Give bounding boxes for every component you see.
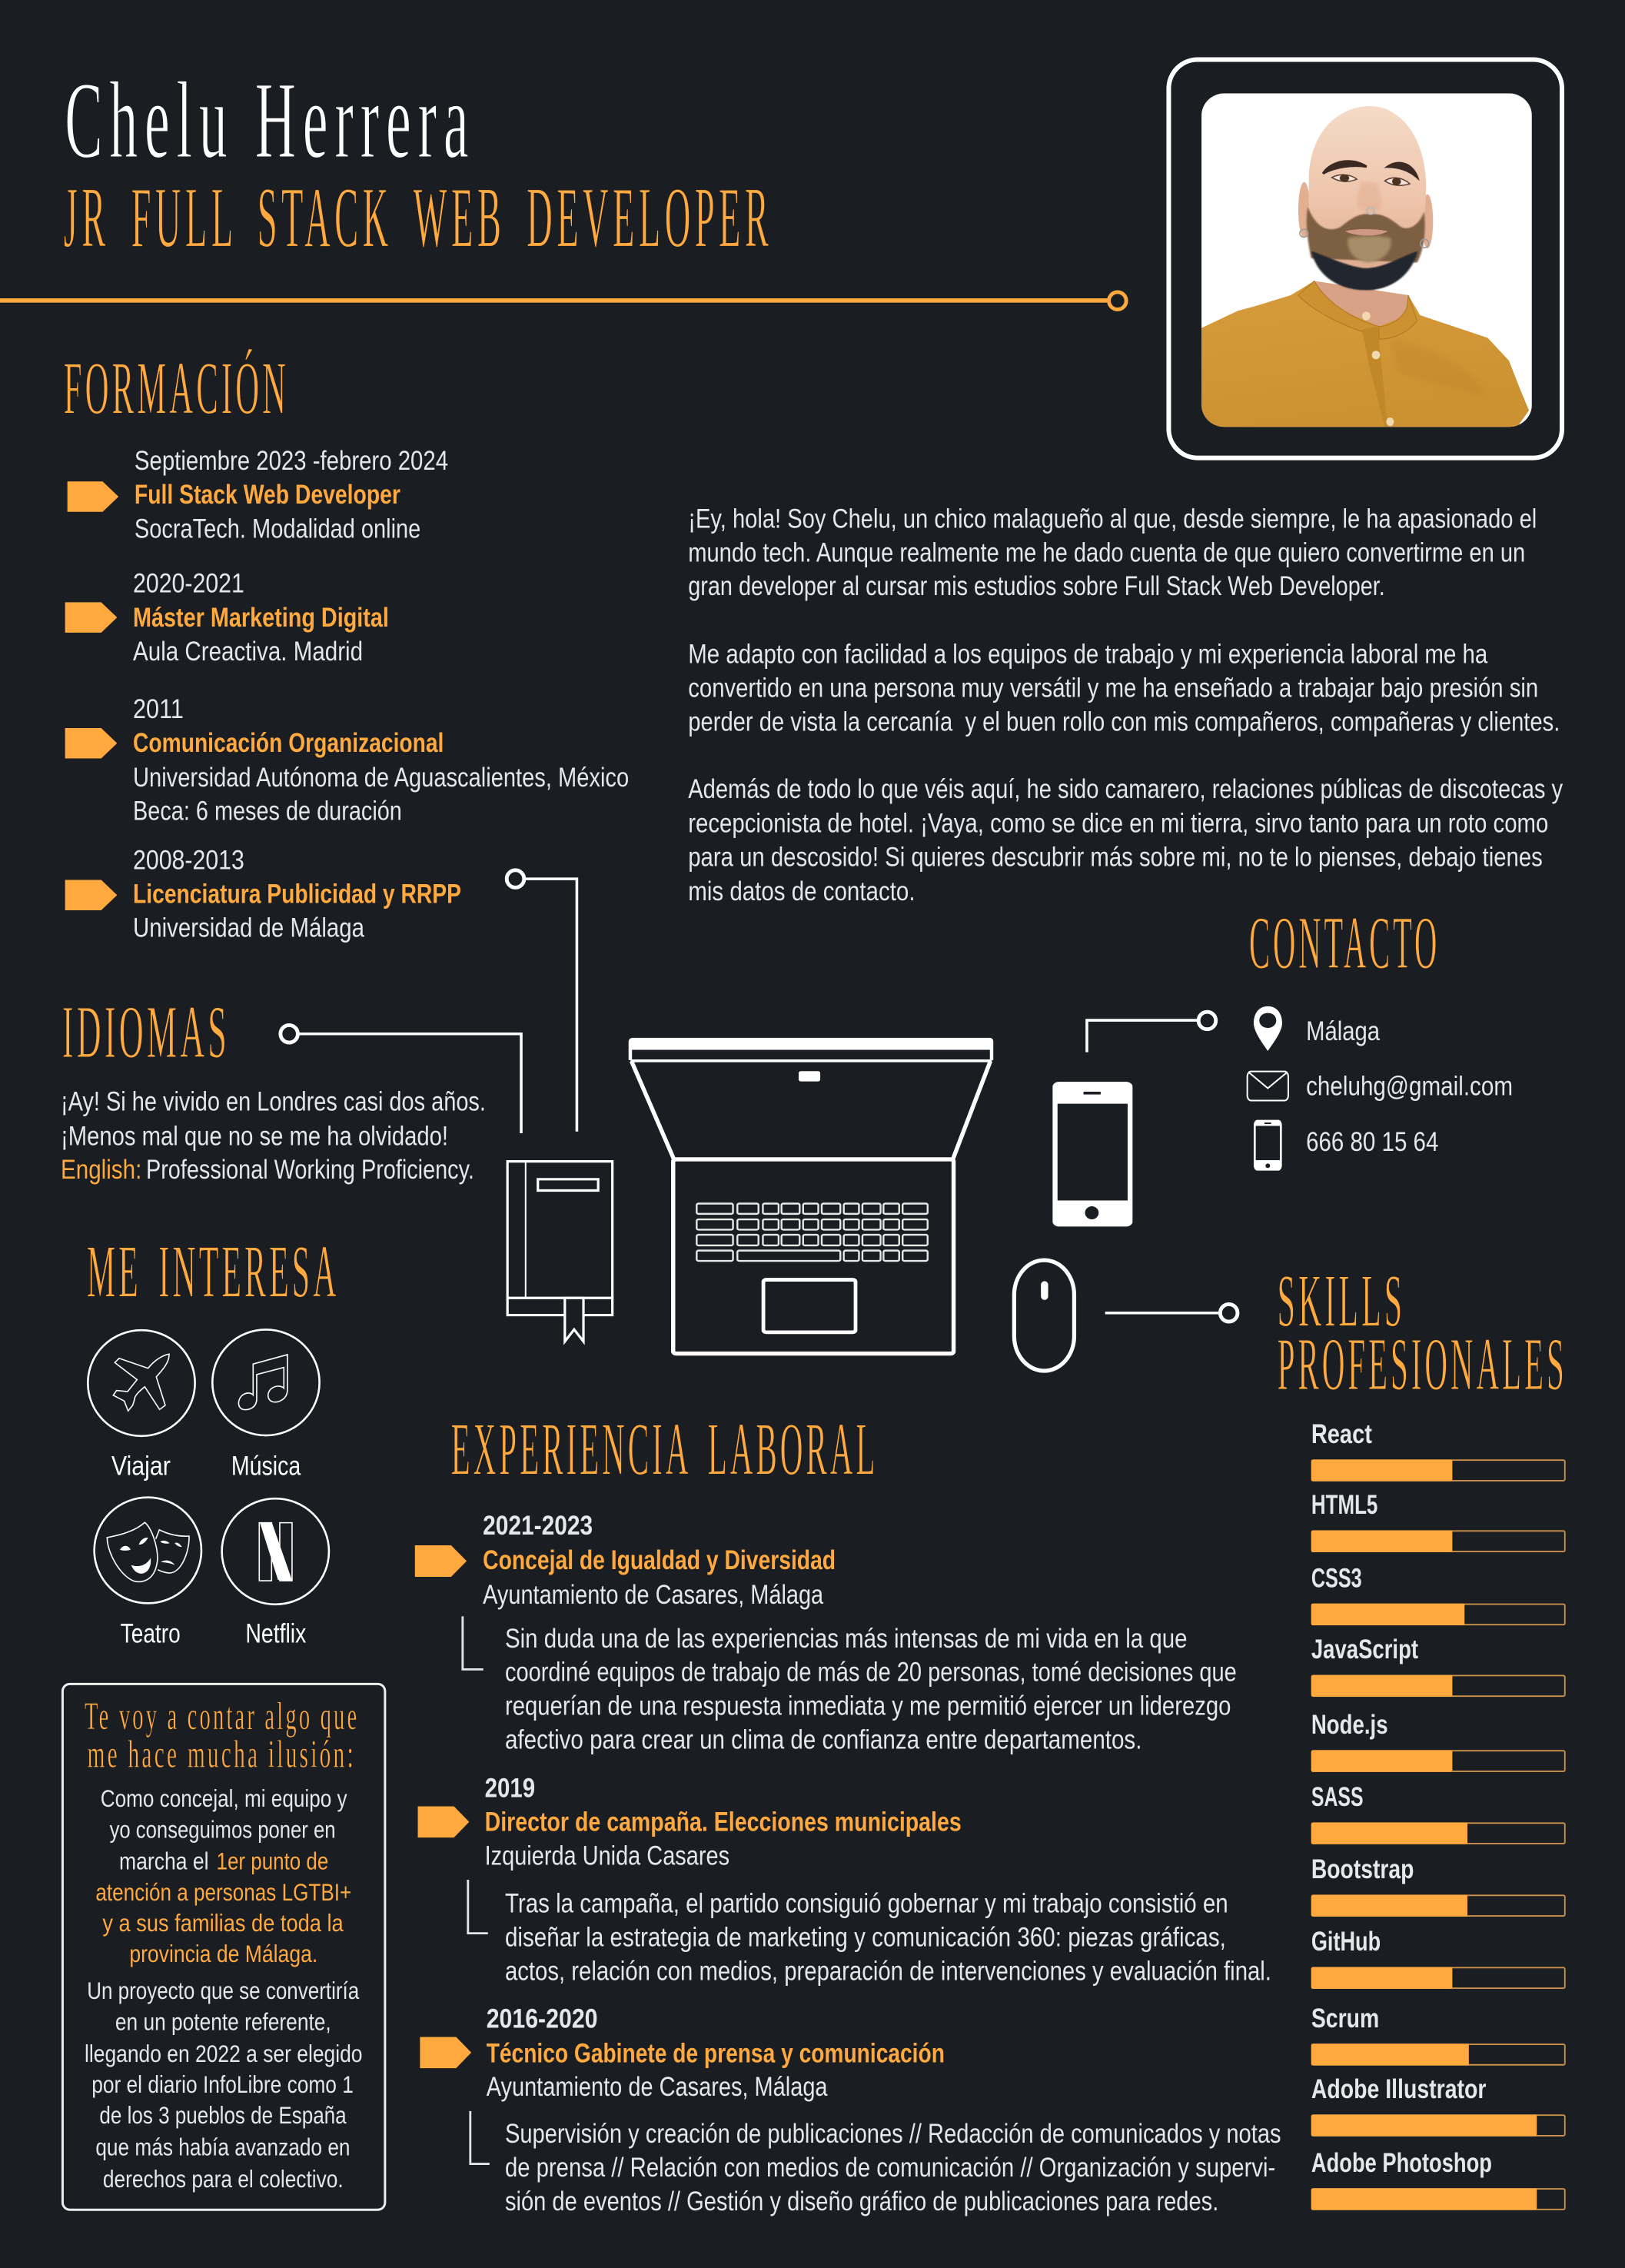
text block: idiomas: Professional Working Proficiency. xyxy=(146,1155,474,1185)
photo frame xyxy=(1168,59,1562,458)
skill: GitHub xyxy=(1311,1927,1565,1989)
connector: formación to book xyxy=(507,870,577,1132)
text block: idiomas: ¡Menos mal que no se me ha olvidado! xyxy=(61,1122,448,1152)
text: ME INTERESA xyxy=(87,1230,339,1313)
text block: about me xyxy=(688,504,1563,906)
text: FORMACIÓN xyxy=(64,348,289,431)
callout heading xyxy=(85,1694,359,1775)
entry: Licenciatura Publicidad y RRPP: Licenciatura Publicidad y RRPP xyxy=(133,880,461,910)
description job 1: Sin duda una de las experiencias más intensas de mi vida en la que xyxy=(505,1624,1187,1654)
description job 3: sión de eventos // Gestión y diseño gráfico de publicaciones para redes. xyxy=(505,2187,1218,2216)
icon: mobile phone xyxy=(1254,1120,1282,1171)
heading: skills profesionales xyxy=(1278,1260,1567,1406)
text block: about me: Me adapto con facilidad a los equipos de trabajo y mi experiencia laboral me ha xyxy=(688,639,1488,669)
panel: formación entries xyxy=(65,446,629,943)
job: Concejal: 2021-2023 xyxy=(483,1511,593,1541)
skill: Scrum: Scrum xyxy=(1311,2004,1379,2034)
callout body: atención a personas LGTBI+ xyxy=(95,1878,351,1906)
callout body: yo conseguimos poner en xyxy=(110,1815,336,1843)
skill: CSS3 xyxy=(1311,1563,1565,1625)
skill: JavaScript: JavaScript xyxy=(1311,1634,1418,1664)
description job 2: actos, relación con medios, preparación de intervenciones y evaluación final. xyxy=(505,1957,1271,1987)
skill: React xyxy=(1311,1419,1565,1482)
entry: Máster Marketing Digital: 2020-2021 xyxy=(133,568,244,598)
description job 3 xyxy=(505,2119,1281,2216)
skill: Node.js xyxy=(1311,1710,1565,1772)
callout body: en un potente referente, xyxy=(115,2008,331,2036)
callout heading: me hace mucha ilusión: xyxy=(88,1732,356,1775)
label: netflix: Netflix xyxy=(245,1619,307,1649)
laptop base xyxy=(673,1159,954,1354)
entry: Licenciatura Publicidad y RRPP: Universidad de Málaga xyxy=(133,913,364,943)
entry: Máster Marketing Digital: Máster Marketing Digital xyxy=(133,603,389,633)
connector: phone to contacto xyxy=(1087,1012,1216,1053)
icon: music note xyxy=(212,1329,320,1435)
entry: Full Stack Web Developer xyxy=(135,446,448,544)
entry: Comunicación Organizacional: 2011 xyxy=(133,694,184,724)
label: viajar: Viajar xyxy=(111,1451,171,1481)
icon: arrow tag 1 xyxy=(68,481,118,512)
job: Director de campaña: Director de campaña. Elecciones municipales xyxy=(485,1807,962,1837)
bracket job 3 xyxy=(470,2111,490,2164)
text block: idiomas xyxy=(61,1086,486,1185)
job: Técnico Gabinete: Ayuntamiento de Casares, Málaga xyxy=(487,2072,828,2102)
job: Concejal: Concejal de Igualdad y Diversidad xyxy=(483,1545,836,1575)
connector: idiomas to book xyxy=(281,1025,521,1133)
laptop lid xyxy=(629,1038,993,1159)
panel: interests xyxy=(88,1329,329,1649)
skill: Adobe Illustrator xyxy=(1311,2074,1565,2137)
skill: CSS3: CSS3 xyxy=(1311,1563,1362,1593)
entry: Licenciatura Publicidad y RRPP xyxy=(133,845,461,943)
skill: Bootstrap xyxy=(1311,1854,1565,1917)
entry: Full Stack Web Developer: Full Stack Web Developer xyxy=(135,480,400,510)
entry: Comunicación Organizacional: Universidad Autónoma de Aguascalientes, México xyxy=(133,763,629,793)
icon: plane xyxy=(88,1330,195,1436)
callout body xyxy=(85,1784,363,2193)
description job 2: diseñar la estrategia de marketing y comunicación 360: piezas gráficas, xyxy=(505,1923,1226,1953)
skill: JavaScript xyxy=(1311,1634,1565,1697)
panel: story callout xyxy=(62,1684,385,2210)
icon: envelope xyxy=(1248,1072,1288,1100)
icon: arrow tag 2 xyxy=(65,602,117,633)
description job 2 xyxy=(505,1889,1271,1987)
entry: Máster Marketing Digital xyxy=(133,568,389,667)
icon: location pin xyxy=(1254,1006,1282,1051)
job: Director de campaña: Izquierda Unida Casares xyxy=(485,1841,729,1871)
illustration: book xyxy=(507,1162,613,1342)
trackpad xyxy=(763,1280,856,1332)
callout body: llegando en 2022 a ser elegido xyxy=(85,2040,363,2067)
skill: Adobe Illustrator: Adobe Illustrator xyxy=(1311,2074,1487,2104)
description job 1 xyxy=(505,1624,1237,1754)
icon: arrow tag 3 xyxy=(65,728,117,758)
description job 3: Supervisión y creación de publicaciones // Redacción de comunicados y notas xyxy=(505,2119,1281,2149)
entry: Licenciatura Publicidad y RRPP: 2008-2013 xyxy=(133,845,244,875)
icon: arrow tag job 3 xyxy=(420,2037,471,2068)
callout body: y a sus familias de toda la xyxy=(102,1909,344,1937)
icon: arrow tag job 1 xyxy=(415,1545,467,1577)
text block: about me: gran developer al cursar mis estudios sobre Full Stack Web Developer. xyxy=(688,571,1385,601)
skill: GitHub: GitHub xyxy=(1311,1927,1381,1957)
panel: experiencia laboral entries xyxy=(415,1511,1281,2216)
skill: React: React xyxy=(1311,1419,1372,1449)
description job 2: Tras la campaña, el partido consiguió gobernar y mi trabajo consistió en xyxy=(505,1889,1228,1919)
text: phone number: 666 80 15 64 xyxy=(1306,1127,1438,1157)
skill: Bootstrap: Bootstrap xyxy=(1311,1854,1414,1884)
callout body: provincia de Málaga. xyxy=(129,1940,317,1967)
panel: contact details xyxy=(1248,1006,1513,1171)
icon: netflix logo xyxy=(222,1498,329,1605)
text block: about me: mis datos de contacto. xyxy=(688,876,916,906)
job: Director de campaña xyxy=(485,1773,962,1871)
callout body: Un proyecto que se convertiría xyxy=(87,1977,360,2004)
text block: idiomas: ¡Ay! Si he vivido en Londres casi dos años. xyxy=(61,1086,486,1116)
entry: Comunicación Organizacional: Comunicación Organizacional xyxy=(133,728,444,758)
callout body: que más había avanzado en xyxy=(95,2133,351,2160)
icon: arrow tag job 2 xyxy=(418,1806,469,1837)
label: música: Música xyxy=(231,1451,301,1481)
entry: Full Stack Web Developer: Septiembre 2023 -febrero 2024 xyxy=(135,446,448,476)
illustration: smartphone xyxy=(1052,1082,1132,1226)
entry: Comunicación Organizacional: Beca: 6 meses de duración xyxy=(133,796,402,826)
icon: arrow tag 4 xyxy=(65,880,117,910)
callout body: Como concejal, mi equipo y xyxy=(101,1784,347,1812)
icon: theatre masks xyxy=(95,1498,201,1603)
description job 1: coordiné equipos de trabajo de más de 20 personas, tomé decisiones que xyxy=(505,1658,1237,1688)
skill: SASS: SASS xyxy=(1311,1782,1364,1812)
skill: HTML5: HTML5 xyxy=(1311,1490,1377,1520)
entry: Máster Marketing Digital: Aula Creactiva. Madrid xyxy=(133,637,363,667)
entry: Comunicación Organizacional xyxy=(133,694,629,826)
job: Técnico Gabinete: Técnico Gabinete de prensa y comunicación xyxy=(487,2038,945,2068)
skill: Scrum xyxy=(1311,2004,1565,2066)
skill: Adobe Photoshop: Adobe Photoshop xyxy=(1311,2148,1492,2178)
skill: Node.js: Node.js xyxy=(1311,1710,1388,1740)
job: Director de campaña: 2019 xyxy=(485,1773,535,1803)
skill: HTML5 xyxy=(1311,1490,1565,1552)
title: name: Chelu Herrera xyxy=(65,59,475,181)
job: Técnico Gabinete: 2016-2020 xyxy=(487,2004,598,2034)
connector: mouse to skills xyxy=(1105,1304,1238,1322)
callout body: marcha el xyxy=(119,1847,209,1874)
callout heading: Te voy a contar algo que xyxy=(85,1694,359,1738)
callout body: por el diario InfoLibre como 1 xyxy=(91,2070,354,2098)
job: Concejal: Ayuntamiento de Casares, Málaga xyxy=(483,1580,823,1610)
skill: SASS xyxy=(1311,1782,1565,1844)
portrait illustration xyxy=(1201,93,1532,427)
label: teatro: Teatro xyxy=(121,1619,181,1649)
description job 1: requerían de una respuesta inmediata y me permitió ejercer un liderezgo xyxy=(505,1691,1231,1721)
text: email: cheluhg@gmail.com xyxy=(1306,1071,1513,1101)
text: EXPERIENCIA LABORAL xyxy=(451,1408,878,1491)
bracket job 2 xyxy=(468,1880,488,1934)
description job 3: de prensa // Relación con medios de comunicación // Organización y supervi- xyxy=(505,2153,1275,2183)
illustration: laptop xyxy=(629,1038,993,1354)
text block: idiomas: English: xyxy=(61,1155,141,1185)
entry: Full Stack Web Developer: SocraTech. Modalidad online xyxy=(135,514,420,544)
heading: skills profesionales: SKILLS xyxy=(1278,1260,1405,1343)
header divider with end dot xyxy=(0,292,1126,309)
text: city: Málaga xyxy=(1306,1016,1380,1046)
bracket job 1 xyxy=(463,1616,484,1669)
keyboard xyxy=(696,1203,928,1261)
callout body: de los 3 pueblos de España xyxy=(99,2101,347,2129)
chart: skill bars xyxy=(1311,1419,1565,2210)
callout body: 1er punto de xyxy=(217,1847,328,1874)
job: Concejal xyxy=(483,1511,836,1610)
job: Técnico Gabinete xyxy=(487,2004,945,2102)
description job 1: afectivo para crear un clima de confianza entre departamentos. xyxy=(505,1724,1141,1754)
skill: Adobe Photoshop xyxy=(1311,2148,1565,2210)
callout body: derechos para el colectivo. xyxy=(103,2165,344,2193)
illustration: mouse xyxy=(1014,1260,1074,1371)
text: IDIOMAS xyxy=(62,991,230,1074)
